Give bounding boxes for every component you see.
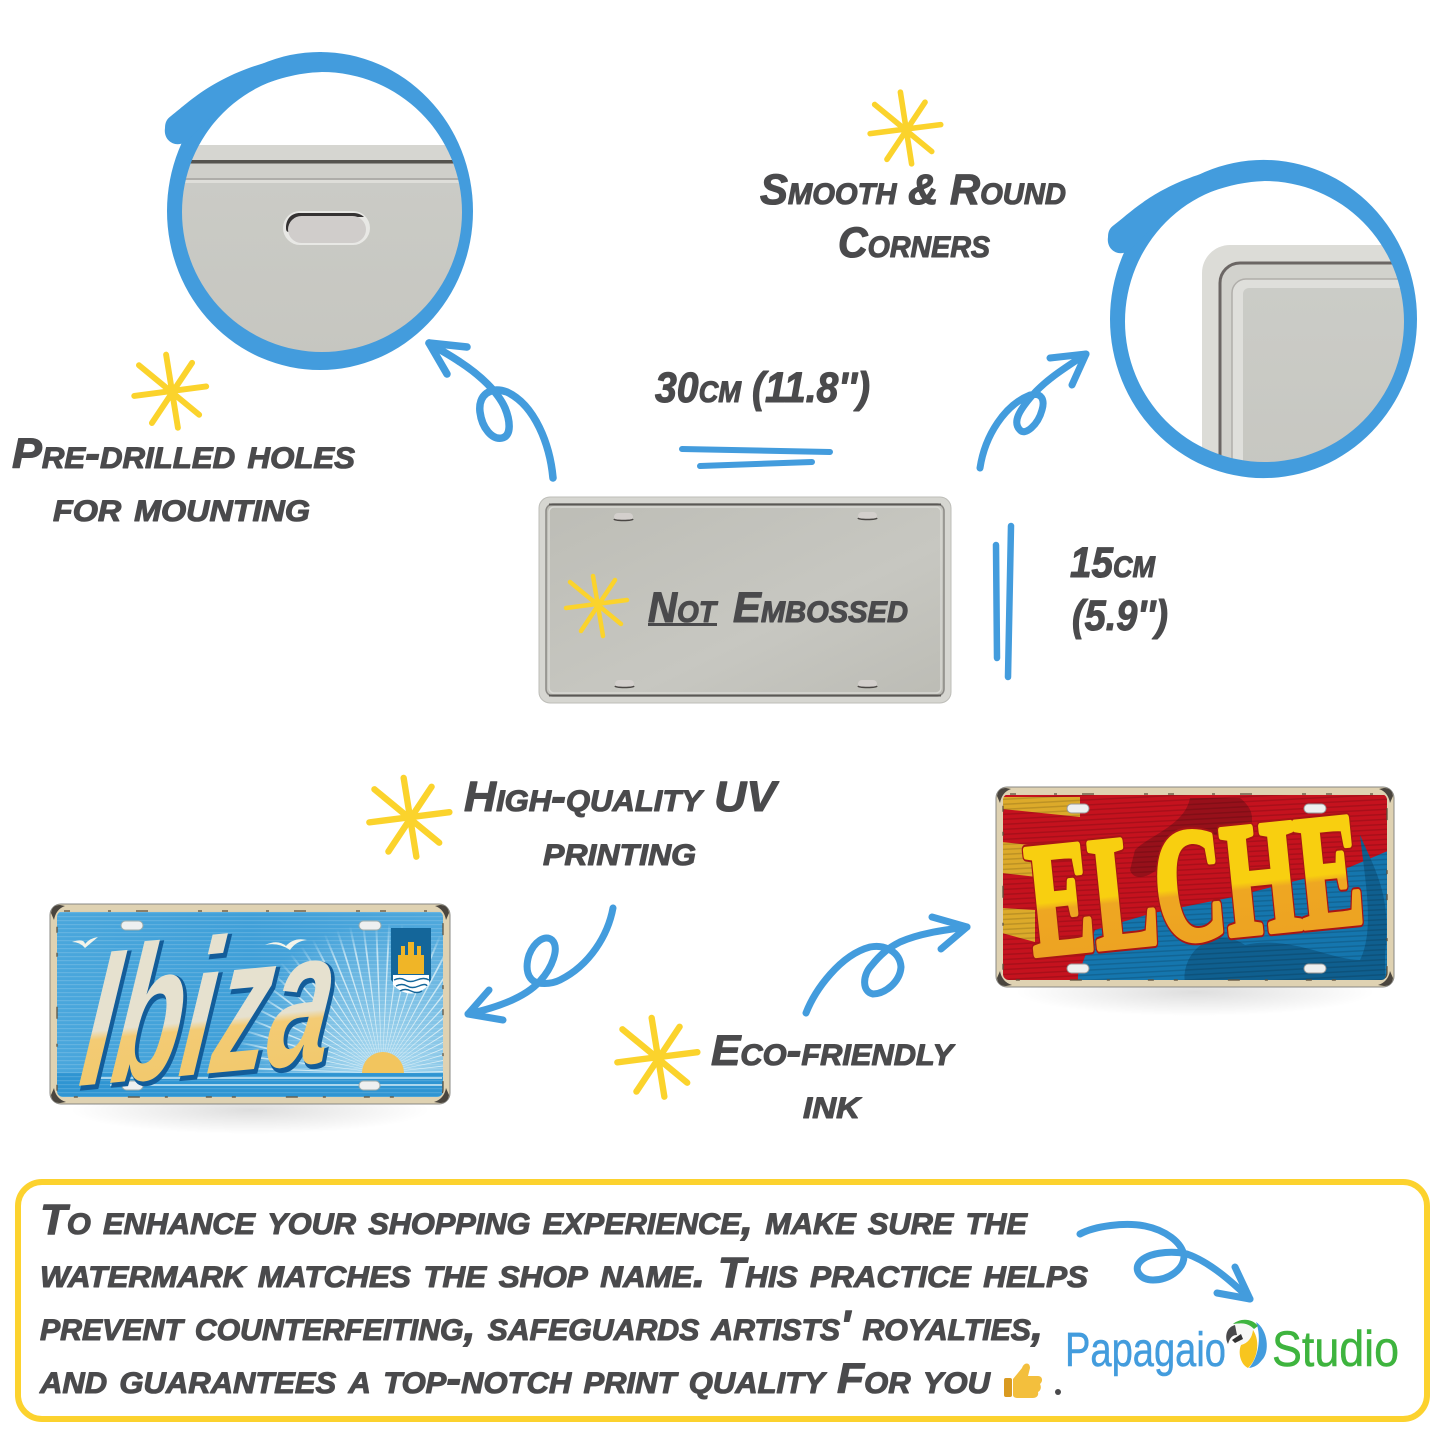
worn corners — [997, 788, 1393, 986]
panel: pre-drilled hole magnifier — [165, 52, 480, 370]
rusted edge — [1000, 791, 1390, 983]
yellow stripes — [1002, 797, 1080, 942]
panel: Elche plate — [996, 779, 1394, 1016]
plate lettering: Ibiza — [72, 887, 349, 1127]
shadow — [1015, 968, 1375, 1016]
dimension: height label: (5.9'') — [1072, 592, 1168, 640]
icon: star — [369, 778, 449, 857]
logo: Papagaio Studio — [1065, 1320, 1399, 1377]
notice text: watermark matches the shop name. This practice helps — [40, 1249, 1088, 1297]
notice text: and guarantees a top-notch print quality For you — [39, 1355, 991, 1403]
sun rays — [307, 998, 457, 1148]
text: smooth and round corners: Smooth & Round — [760, 166, 1066, 214]
rusted edge — [54, 908, 446, 1100]
shadow — [70, 1086, 430, 1134]
plate lettering — [71, 887, 352, 1130]
text: not embossed: Embossed — [733, 584, 908, 632]
text: uv printing — [464, 773, 779, 875]
text: not embossed: Not — [648, 584, 718, 632]
text: smooth and round corners: Corners — [838, 219, 990, 267]
panel: watermark notice box — [18, 1182, 1427, 1419]
ring tail — [1108, 161, 1265, 253]
text: pre-drilled holes: Pre-drilled holes — [12, 430, 355, 478]
text: eco-friendly ink: ink — [803, 1080, 863, 1128]
panel: blank grey plate — [539, 497, 951, 703]
arrow: plate to hole detail — [429, 343, 553, 478]
dimension: width label: 30cm (11.8'') — [655, 364, 870, 412]
arrow: to shop logo — [1080, 1224, 1250, 1299]
ring tail — [165, 52, 322, 144]
dimension: width strokes — [682, 449, 830, 466]
notice text: To enhance your shopping experience, make sure the — [40, 1196, 1028, 1244]
dimension: height label — [1070, 539, 1168, 640]
icon: star — [617, 1018, 697, 1097]
panel: Ibiza plate — [50, 904, 450, 1128]
swirl ornaments — [1130, 798, 1252, 877]
logo word: Papagaio: Papagaio — [1065, 1324, 1226, 1377]
arrow: plate to corner detail — [980, 354, 1086, 468]
full stop — [1055, 1389, 1061, 1395]
text: uv printing: printing — [543, 827, 696, 875]
plate detail with hole — [182, 145, 462, 352]
icon: thumbs up — [1004, 1364, 1042, 1398]
icon: star — [134, 355, 206, 428]
seagulls — [72, 937, 307, 950]
ring — [1110, 160, 1417, 478]
plate holes — [1067, 804, 1326, 973]
text: pre-drilled holes: for mounting — [53, 483, 310, 531]
plate holes — [121, 921, 381, 1090]
text: pre-drilled holes — [12, 430, 355, 531]
notice text — [39, 1196, 1088, 1403]
logo word: Studio: Studio — [1272, 1321, 1399, 1377]
panel: rounded corner magnifier — [1108, 160, 1417, 478]
worn corners — [51, 905, 449, 1103]
crest — [391, 928, 431, 994]
dimension: height label: 15cm — [1070, 539, 1156, 587]
plate corner detail — [1202, 245, 1404, 462]
sun — [362, 1052, 404, 1073]
icon: parrot — [1226, 1320, 1267, 1368]
ring — [167, 52, 473, 370]
text: eco-friendly ink — [711, 1027, 956, 1128]
text: not embossed — [648, 584, 908, 632]
arrow: uv printing to Ibiza plate — [468, 908, 613, 1020]
dimension: height strokes — [996, 526, 1011, 677]
icon: star — [870, 92, 941, 164]
sky glow — [244, 935, 443, 1073]
mounting holes — [614, 512, 877, 688]
blue lower area — [1078, 850, 1390, 985]
plate lettering: Ibiza — [74, 890, 351, 1130]
text: smooth and round corners — [760, 166, 1066, 267]
text: uv printing: High-quality UV — [464, 773, 779, 821]
arrow: eco-friendly to Elche plate — [806, 917, 967, 1013]
notice text: prevent counterfeiting, safeguards artists' royalties, — [40, 1302, 1043, 1350]
icon: star — [566, 576, 627, 636]
text: eco-friendly ink: Eco-friendly — [711, 1027, 956, 1075]
